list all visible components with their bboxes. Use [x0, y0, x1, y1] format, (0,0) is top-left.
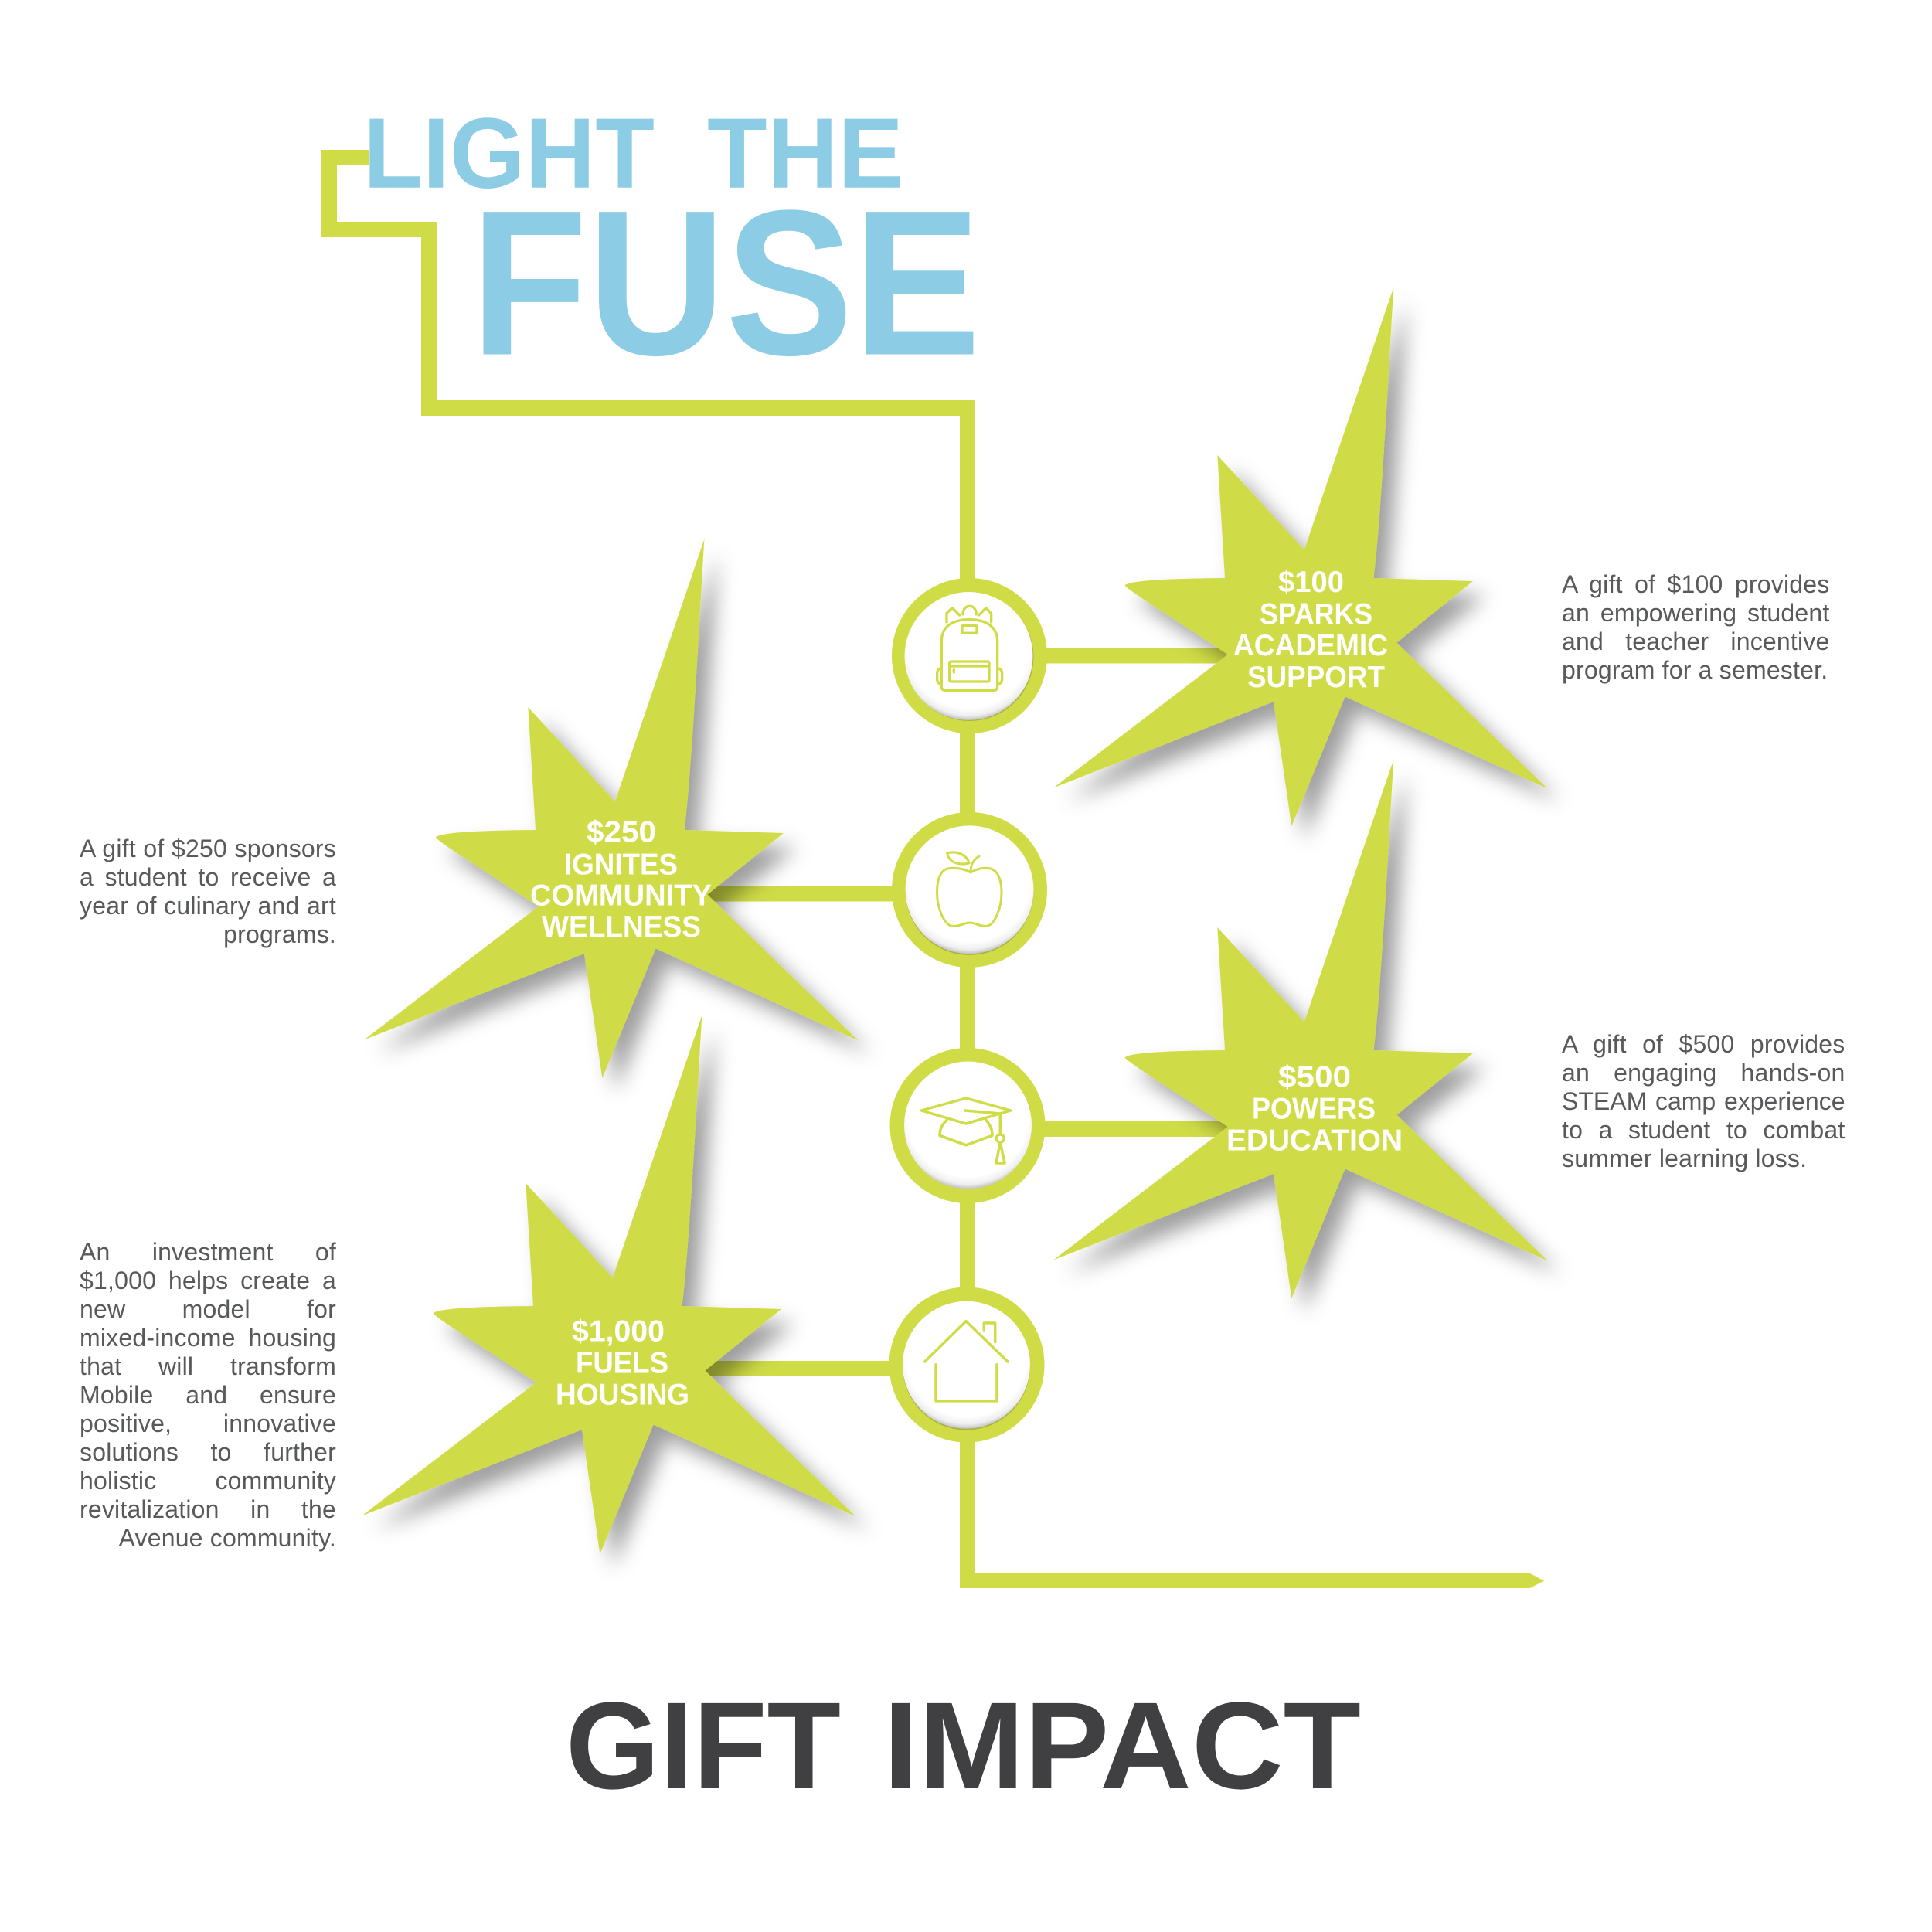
connector: $1,000: [699, 1361, 900, 1376]
text block: $1,000 description: revitalization in the: [80, 1495, 336, 1523]
text block: $1,000 description: that will transform: [80, 1352, 336, 1380]
text block: $100 description: program for a semester.: [1562, 656, 1828, 684]
label: $250: [530, 816, 712, 944]
text block: $250 description: a student to receive a: [80, 863, 336, 891]
text block: $100 description: an empowering student: [1562, 599, 1830, 627]
heading: Gift Impact: GIFT: [566, 1676, 841, 1815]
starburst: $250 Ignites Community Wellness: [364, 539, 858, 1078]
starburst: $500 Powers Education: [1053, 759, 1547, 1298]
starburst: $1,000 Fuels Housing: [362, 1015, 856, 1554]
fuse line: [321, 150, 1544, 1588]
label: $500: $500: [1278, 1060, 1351, 1094]
label: $100: ACADEMIC: [1233, 629, 1388, 662]
label: $1,000: $1,000: [572, 1315, 665, 1348]
node: graduation cap: [890, 1048, 1045, 1203]
text block: $100 description: A gift of $100 provides: [1562, 570, 1830, 598]
text block: $1,000 description: [80, 1238, 336, 1552]
text block: $1,000 description: mixed-income housing: [80, 1324, 336, 1352]
text block: $100 description: [1562, 570, 1830, 684]
text block: $500 description: summer learning loss.: [1562, 1145, 1807, 1172]
label: $500: EDUCATION: [1226, 1124, 1403, 1158]
text block: $1,000 description: Mobile and ensure: [80, 1381, 336, 1409]
text block: $500 description: an engaging hands-on: [1562, 1059, 1845, 1087]
heading: Gift Impact: IMPACT: [883, 1676, 1361, 1815]
text block: $1,000 description: solutions to further: [80, 1438, 336, 1466]
text block: $500 description: STEAM camp experience: [1562, 1087, 1845, 1115]
icon: backpack: [937, 606, 1002, 690]
connector: $250: [699, 886, 900, 901]
icon: house: [925, 1321, 1008, 1401]
starburst: $100 Sparks Academic Support: [1053, 287, 1547, 826]
title: Light the Fuse: THE: [707, 98, 903, 209]
node: apple: [892, 812, 1047, 968]
label: $250: IGNITES: [564, 849, 678, 881]
text block: $1,000 description: $1,000 helps create a: [80, 1267, 336, 1294]
label: $1,000: FUELS: [576, 1346, 668, 1380]
text block: $1,000 description: An investment of: [80, 1238, 336, 1266]
label: $250: COMMUNITY: [530, 879, 712, 912]
label: $100: [1233, 566, 1388, 694]
node: house: [889, 1287, 1045, 1442]
text block: $250 description: [80, 835, 336, 948]
text block: $250 description: A gift of $250 sponsors: [80, 835, 336, 862]
label: $1,000: [556, 1315, 689, 1411]
icon: graduation cap: [921, 1098, 1011, 1163]
title: Light the Fuse: LIGHT: [363, 98, 655, 209]
text block: $500 description: to a student to combat: [1562, 1116, 1845, 1144]
label: $100: SPARKS: [1260, 598, 1372, 631]
text block: $1,000 description: positive, innovative: [80, 1410, 336, 1437]
label: $250: WELLNESS: [542, 910, 701, 944]
icon: apple: [937, 852, 1002, 927]
label: $1,000: HOUSING: [556, 1379, 689, 1411]
connector: $500: [1036, 1121, 1233, 1137]
text block: $1,000 description: Avenue community.: [119, 1524, 336, 1552]
node: backpack: [892, 578, 1047, 733]
text block: $100 description: and teacher incentive: [1562, 628, 1830, 655]
connector: $100: [1036, 648, 1233, 663]
heading: Gift Impact: [566, 1676, 1361, 1815]
label: $500: [1226, 1060, 1403, 1158]
label: $100: $100: [1278, 566, 1344, 599]
text block: $1,000 description: new model for: [80, 1295, 336, 1323]
text block: $500 description: [1562, 1030, 1845, 1172]
text block: $250 description: year of culinary and art: [80, 892, 336, 920]
label: $500: POWERS: [1252, 1093, 1376, 1125]
text block: $1,000 description: holistic community: [80, 1467, 336, 1495]
label: $100: SUPPORT: [1247, 661, 1385, 694]
text block: $250 description: programs.: [223, 920, 336, 948]
text block: $500 description: A gift of $500 provides: [1562, 1030, 1845, 1058]
title: Light the Fuse: FUSE: [471, 167, 981, 399]
label: $250: $250: [587, 816, 656, 849]
title: Light the Fuse: [363, 98, 981, 398]
